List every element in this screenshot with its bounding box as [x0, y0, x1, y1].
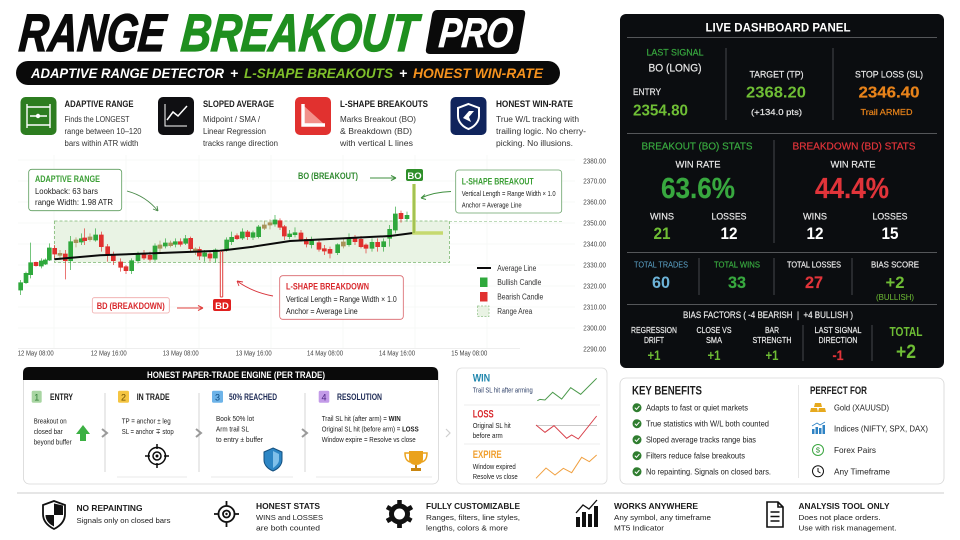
- key benefits list: Sloped average tracks range bias: [646, 435, 756, 445]
- callout: adaptive range: Lookback: 63 bars: [35, 186, 98, 196]
- step 4: resolution: Trail SL hit (after arm) = WIN: [322, 414, 401, 423]
- step 4: resolution: RESOLUTION: [337, 392, 382, 402]
- feature: honest win-rate: HONEST WIN-RATE: [496, 99, 573, 110]
- subtitle pill: [16, 61, 560, 85]
- icon: target: [145, 444, 169, 468]
- stop loss block: Trail ARMED: [860, 107, 912, 117]
- price axis: 2340.00: [583, 242, 606, 249]
- bias factors: CLOSE VS: [696, 326, 732, 335]
- key benefits list: True statistics with W/L both counted: [646, 419, 769, 429]
- totals row: 60: [652, 273, 670, 292]
- time axis: 14 May 16:00: [379, 350, 415, 357]
- outcome: expire: [473, 449, 597, 481]
- breakout stats: BREAKOUT (BO) STATS: [642, 142, 753, 152]
- arrow: l-shape breakdown: [237, 281, 273, 296]
- icon: blue shield: [264, 448, 282, 471]
- step 3: 50% reached: to entry ± buffer: [216, 435, 263, 444]
- totals row: TOTAL LOSSES: [787, 260, 841, 270]
- icon: dollar coin: $: [816, 446, 821, 455]
- step 3: 50% reached: 50% REACHED: [229, 392, 277, 402]
- strip: works anywhere: WORKS ANYWHERE: [614, 501, 698, 511]
- strip: honest stats: are both counted: [256, 524, 320, 532]
- bias factors: TOTAL: [890, 324, 923, 339]
- step 1: entry: 1: [34, 392, 39, 402]
- perfect for list: Any Timeframe: [834, 466, 890, 476]
- bias factors: DIRECTION: [818, 336, 858, 345]
- stop loss block: [855, 70, 923, 117]
- feature: adaptive range: Finds the LONGEST: [64, 115, 130, 124]
- time axis: 15 May 08:00: [451, 350, 487, 357]
- outcome: loss: before arm: [473, 431, 503, 440]
- step 2: in trade: 2: [121, 392, 126, 402]
- range area: [54, 221, 450, 262]
- time axis: 13 May 08:00: [163, 350, 199, 357]
- step 2: in trade: [118, 391, 174, 468]
- engine heading: HONEST PAPER-TRADE ENGINE (PER TRADE): [147, 370, 325, 381]
- step 1: entry: [32, 391, 90, 447]
- bias factors: +1: [708, 347, 721, 363]
- last signal block: [633, 48, 704, 120]
- strip: analysis tool only: Does not place orders.: [798, 513, 880, 522]
- bo badge: BO: [407, 171, 422, 182]
- feature: sloped average: Linear Regression: [203, 127, 266, 136]
- chevron 4: [446, 429, 450, 437]
- dashboard title: LIVE DASHBOARD PANEL: [706, 20, 850, 34]
- price axis: 2360.00: [583, 200, 606, 207]
- bias factors: +2: [896, 342, 916, 363]
- key benefits list: Adapts to fast or quiet markets: [646, 403, 748, 413]
- step 2: in trade: SL = anchor ∓ stop: [122, 427, 174, 436]
- icon: navy shield: [450, 97, 486, 135]
- breakdown stats: LOSSES: [872, 212, 908, 222]
- title: [17, 5, 525, 63]
- totals row: 33: [728, 273, 746, 292]
- bias factors: LAST SIGNAL: [814, 326, 862, 335]
- bias factors: REGRESSION: [631, 326, 677, 335]
- bd badge: [213, 299, 231, 312]
- bottom strip: [17, 493, 944, 532]
- title: PRO: [437, 9, 515, 56]
- perfect for list: Gold (XAUUSD): [834, 403, 889, 413]
- callout: adaptive range: range Width: 1.98 ATR: [35, 197, 113, 207]
- breakdown stats: 15: [882, 224, 898, 243]
- outcome: loss: LOSS: [473, 408, 494, 420]
- target block: (+134.0 pts): [751, 107, 802, 117]
- bias factors: DRIFT: [644, 336, 664, 345]
- breakout stats: 63.6%: [661, 173, 735, 205]
- feature: l-shape breakouts: with vertical L lines: [339, 139, 413, 148]
- step 4: resolution: [319, 391, 427, 471]
- breakout stats: LOSSES: [712, 212, 746, 222]
- step 4: resolution: Window expire = Resolve vs close: [322, 435, 416, 444]
- breakout stats: WIN RATE: [676, 160, 720, 170]
- arrow: to bo badge: [370, 176, 396, 180]
- icon: shield: [43, 501, 65, 529]
- label: bd breakdown: BD (BREAKDOWN): [97, 301, 165, 312]
- icon: sloped line chart: [158, 97, 194, 135]
- callout: l-shape breakdown: Vertical Length = Range Width × 1.0: [286, 294, 397, 304]
- candles: right part: [310, 207, 409, 258]
- arrow: l-shape breakout: [421, 192, 451, 200]
- step 4: resolution: 4: [321, 392, 327, 402]
- chart legend: Bearish Candle: [497, 293, 544, 302]
- outcome: win: Trail SL hit after arming: [473, 386, 533, 394]
- breakout stats: 21: [654, 224, 670, 243]
- label: bo breakout: BO (BREAKOUT): [298, 171, 358, 182]
- perfect for list: PERFECT FOR: [810, 385, 867, 397]
- step 3: 50% reached: [212, 391, 282, 471]
- stop loss block: 2346.40: [858, 84, 920, 102]
- step 1: entry: ENTRY: [50, 392, 73, 402]
- time axis: [18, 350, 487, 357]
- icon: gear: [387, 500, 412, 528]
- outcome: win: WIN: [473, 373, 490, 385]
- chevron 1: [102, 429, 107, 437]
- icon: growth bars: [576, 500, 598, 527]
- candles: left part: [19, 215, 308, 295]
- breakdown stats: [792, 142, 916, 243]
- average line: [54, 233, 415, 259]
- feature: adaptive range: [20, 97, 142, 148]
- callout: l-shape breakout: L-SHAPE BREAKOUT: [462, 176, 534, 187]
- arrow: to bd badge: [177, 306, 203, 310]
- strip: works anywhere: [576, 500, 711, 532]
- icon: gold bars: [810, 403, 826, 412]
- last signal block: LAST SIGNAL: [646, 48, 704, 58]
- strip: analysis tool only: Use with risk management.: [798, 524, 896, 532]
- strip: works anywhere: Any symbol, any timeframe: [614, 513, 711, 522]
- feature: sloped average: [158, 97, 278, 148]
- time axis: 12 May 08:00: [18, 350, 54, 357]
- feature: honest win-rate: picking. No illusions.: [496, 139, 573, 148]
- price axis: 2350.00: [583, 221, 606, 228]
- breakout stats: WINS: [650, 212, 674, 222]
- feature: sloped average: Midpoint / SMA /: [203, 115, 261, 124]
- breakout stats: 12: [720, 224, 738, 243]
- icon: up arrow: [76, 425, 90, 441]
- target block: [746, 70, 806, 117]
- price axis: 2290.00: [583, 347, 606, 354]
- subtitle pill: +: [230, 65, 238, 81]
- strip: fully customizable: Ranges, filters, line styles,: [426, 513, 520, 522]
- callout: l-shape breakout: Anchor = Average Line: [462, 201, 522, 210]
- subtitle pill: L-SHAPE BREAKOUTS: [244, 65, 394, 81]
- key benefits list: No repainting. Signals on closed bars.: [646, 467, 771, 477]
- last signal block: BO (LONG): [648, 63, 702, 75]
- feature: sloped average: SLOPED AVERAGE: [203, 99, 274, 110]
- strip: honest stats: [214, 501, 323, 532]
- chart legend: Range Area: [497, 307, 533, 316]
- feature: adaptive range: ADAPTIVE RANGE: [64, 99, 134, 110]
- chart legend: Average Line: [497, 264, 537, 273]
- outcome: win: [473, 373, 597, 401]
- bias factors: BIAS FACTORS ( -4 BEARISH | +4 BULLISH ): [683, 310, 853, 320]
- time axis: 14 May 08:00: [307, 350, 343, 357]
- icon: L shape: [295, 97, 331, 135]
- panel: benefits: [620, 378, 944, 484]
- last signal block: 2354.80: [633, 102, 688, 120]
- icon: indices bars: [812, 422, 825, 434]
- perfect for list: Indices (NIFTY, SPX, DAX): [834, 424, 928, 434]
- perfect for list: [810, 385, 928, 477]
- totals row: [634, 260, 919, 302]
- chevron 2: [196, 429, 201, 437]
- subtitle pill: HONEST WIN-RATE: [413, 65, 544, 81]
- chevron 3: [302, 429, 307, 437]
- price axis: 2380.00: [583, 158, 606, 165]
- totals row: +2: [886, 273, 904, 292]
- icon: trophy: [405, 451, 427, 471]
- outcome: expire: Resolve vs close: [473, 472, 518, 481]
- feature: adaptive range: bars within ATR width: [64, 139, 138, 148]
- breakdown stats: WINS: [803, 212, 827, 222]
- strip: no repainting: Signals only on closed bars: [76, 516, 171, 525]
- step 1: entry: Breakout on: [34, 417, 67, 426]
- bias factors: STRENGTH: [752, 336, 792, 345]
- strip: works anywhere: MT5 Indicator: [614, 524, 665, 532]
- bias factors: -1: [832, 347, 844, 363]
- feature: l-shape breakouts: Marks Breakout (BO): [340, 115, 416, 124]
- time axis: 12 May 16:00: [91, 350, 127, 357]
- bd badge: BD: [215, 301, 229, 312]
- step 3: 50% reached: Arm trail SL: [216, 424, 249, 434]
- price axis: [583, 158, 606, 354]
- callout: l-shape breakout: Vertical Length = Range Width × 1.0: [462, 189, 556, 198]
- price axis: 2330.00: [583, 263, 606, 270]
- bias factors: +1: [648, 347, 661, 363]
- price axis: 2320.00: [583, 284, 606, 291]
- subtitle pill: ADAPTIVE RANGE DETECTOR: [30, 65, 225, 81]
- label: bd breakdown: [92, 298, 169, 313]
- panel: trade outcomes: [457, 368, 607, 484]
- strip: analysis tool only: [767, 501, 896, 532]
- icon: range detector: [20, 97, 56, 135]
- step 2: in trade: TP = anchor ± leg: [122, 417, 171, 426]
- price axis: 2370.00: [583, 179, 606, 186]
- last signal block: ENTRY: [633, 87, 661, 97]
- callout: adaptive range: ADAPTIVE RANGE: [35, 174, 100, 185]
- callout: l-shape breakout: [456, 170, 562, 213]
- feature: honest win-rate: [450, 97, 586, 148]
- step 1: entry: beyond buffer: [34, 438, 72, 447]
- callout: l-shape breakdown: L-SHAPE BREAKDOWN: [286, 281, 369, 292]
- l-shape breakout line: [414, 184, 443, 233]
- feature: adaptive range: range between 10–120: [64, 127, 142, 136]
- icon: clock: [812, 466, 824, 477]
- chart legend: Bullish Candle: [497, 278, 542, 287]
- target block: TARGET (TP): [750, 70, 804, 80]
- step 3: 50% reached: Book 50% lot: [216, 414, 255, 423]
- breakout stats: [642, 142, 753, 243]
- totals row: BIAS SCORE: [871, 260, 919, 270]
- target block: 2368.20: [746, 84, 806, 102]
- totals row: 27: [805, 273, 823, 292]
- feature: sloped average: tracks range direction: [203, 139, 278, 148]
- subtitle pill: +: [399, 65, 407, 81]
- title: RANGE: [17, 5, 170, 63]
- feature: honest win-rate: True W/L tracking with: [496, 115, 579, 124]
- time axis: 13 May 16:00: [236, 350, 272, 357]
- key benefits list: Filters reduce false breakouts: [646, 451, 745, 461]
- perfect for list: Forex Pairs: [834, 445, 876, 455]
- callout: l-shape breakdown: Anchor = Average Line: [286, 306, 358, 316]
- feature: l-shape breakouts: [295, 97, 428, 148]
- outcome: expire: Window expired: [473, 462, 516, 471]
- outcome: loss: [473, 408, 597, 440]
- strip: analysis tool only: ANALYSIS TOOL ONLY: [798, 501, 890, 511]
- key benefits list: [632, 383, 771, 477]
- outcome: expire: EXPIRE: [473, 449, 502, 461]
- chart legend: [477, 264, 544, 316]
- bias factors: SMA: [706, 336, 723, 345]
- step 1: entry: closed bar: [34, 427, 63, 436]
- bias factors: [631, 310, 923, 363]
- strip: no repainting: NO REPAINTING: [76, 503, 143, 513]
- bias factors: +1: [766, 347, 779, 363]
- strip: fully customizable: FULLY CUSTOMIZABLE: [426, 501, 520, 511]
- feature: honest win-rate: trailing logic. No cherry-: [496, 127, 586, 136]
- l-shape breakdown line: [220, 251, 223, 297]
- key benefits list: KEY BENEFITS: [632, 383, 702, 397]
- strip: fully customizable: lengths, colors & more: [426, 524, 508, 532]
- totals row: TOTAL TRADES: [634, 260, 688, 270]
- step 4: resolution: Original SL hit (before arm) = LOSS: [322, 424, 419, 434]
- arrow: adaptive range: [127, 191, 158, 211]
- totals row: (BULLISH): [876, 293, 914, 302]
- bias factors: BAR: [765, 326, 779, 335]
- price axis: 2300.00: [583, 326, 606, 333]
- price chart: [18, 155, 606, 357]
- breakdown stats: 12: [806, 224, 824, 243]
- outcome: loss: Original SL hit: [473, 421, 511, 430]
- price axis: 2310.00: [583, 305, 606, 312]
- title: BREAKOUT: [179, 5, 423, 63]
- icon: document: [767, 502, 783, 527]
- strip: no repainting: [43, 501, 171, 529]
- panel: paper-trade engine: [23, 367, 450, 484]
- step 3: 50% reached: 3: [215, 392, 220, 402]
- step 2: in trade: IN TRADE: [137, 392, 170, 402]
- callout: l-shape breakdown: [280, 276, 403, 319]
- icon: target: [214, 501, 239, 527]
- panel: live dashboard: [620, 14, 944, 368]
- breakdown stats: BREAKDOWN (BD) STATS: [792, 142, 916, 152]
- feature: l-shape breakouts: & Breakdown (BD): [340, 127, 412, 136]
- breakdown stats: WIN RATE: [830, 160, 876, 170]
- strip: honest stats: WINS and LOSSES: [256, 513, 323, 522]
- strip: fully customizable: [387, 500, 520, 532]
- stop loss block: STOP LOSS (SL): [855, 70, 923, 80]
- feature: l-shape breakouts: L-SHAPE BREAKOUTS: [340, 99, 428, 110]
- strip: honest stats: HONEST STATS: [256, 501, 320, 511]
- callout: adaptive range: [29, 169, 122, 211]
- breakdown stats: 44.4%: [815, 173, 889, 205]
- totals row: TOTAL WINS: [714, 260, 760, 270]
